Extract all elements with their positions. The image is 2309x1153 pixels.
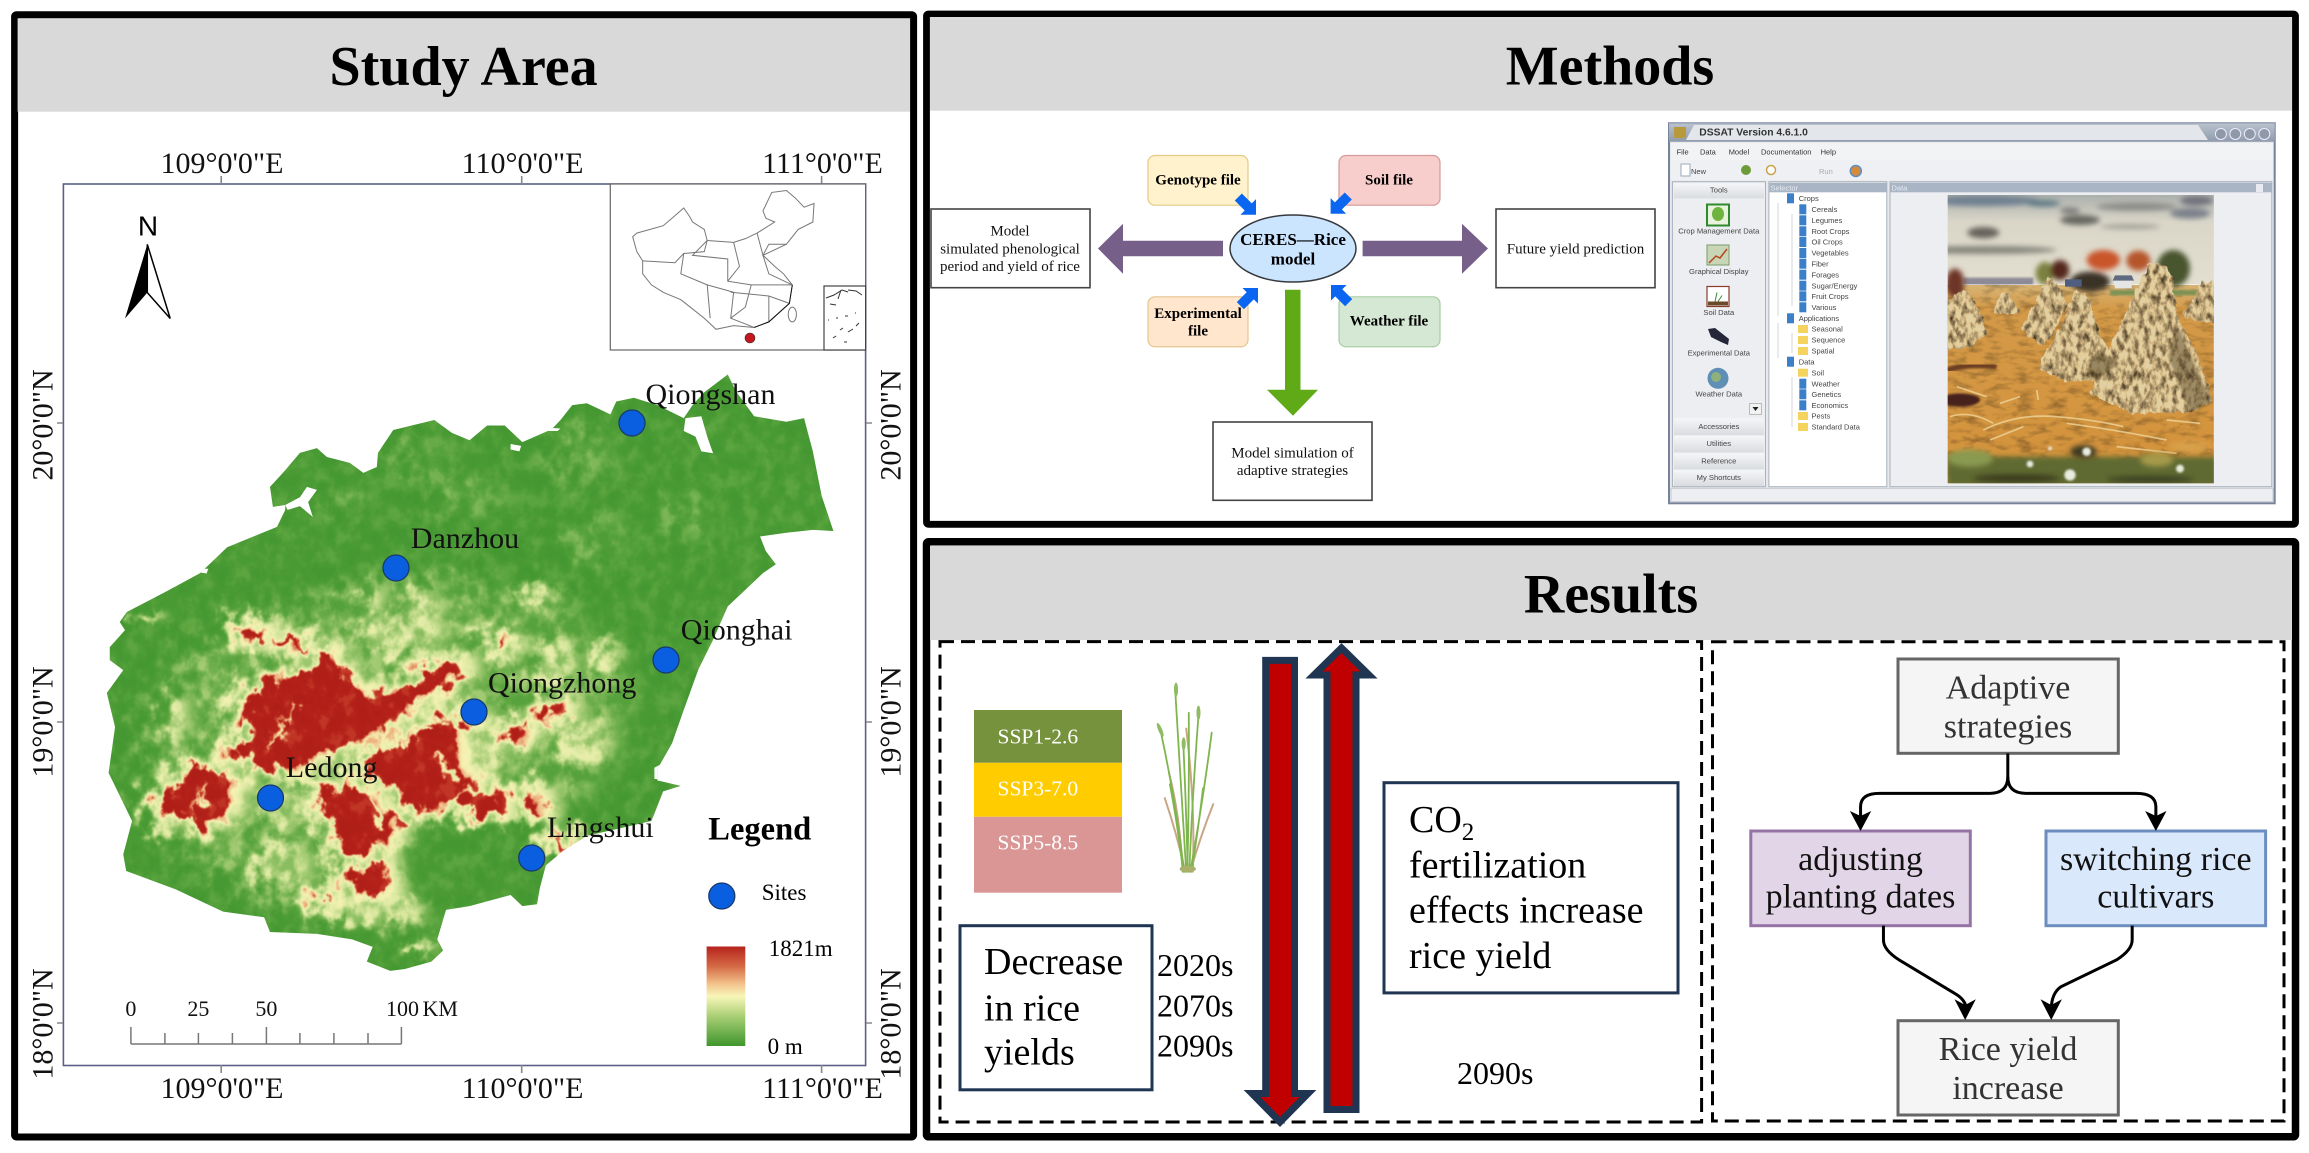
input: experimental file: Experimental xyxy=(1154,306,1242,322)
map legend: 1821m xyxy=(769,936,833,961)
longitude labels: 110°0'0"E xyxy=(462,1072,583,1105)
site labels: Qiongzhong xyxy=(488,666,636,700)
menu bar: Help xyxy=(1821,147,1836,156)
SSP scenario stack: SSP5-8.5 xyxy=(998,830,1078,854)
output box: phenological period and yield: Model xyxy=(990,224,1030,240)
site labels: Qiongshan xyxy=(646,378,776,411)
selector tree panel: Fiber xyxy=(1812,259,1829,268)
selector tree panel: Sequence xyxy=(1812,336,1845,345)
flow connectors xyxy=(1850,753,2167,1020)
decade labels for decrease: 2020s xyxy=(1157,947,1233,983)
SSP scenario stack: SSP1-2.6 xyxy=(998,724,1078,748)
window title bar: DSSAT Version 4.6.1.0 xyxy=(1699,127,1808,138)
input: weather file xyxy=(1339,297,1440,347)
selector tree panel: Economics xyxy=(1812,401,1848,410)
inset map of China xyxy=(610,184,866,350)
map legend: Legend xyxy=(708,812,811,848)
latitude labels: 18°0'0"N xyxy=(26,968,60,1080)
selector tree panel: Seasonal xyxy=(1812,325,1843,334)
map of Hainan island terrain xyxy=(106,374,834,971)
longitude labels xyxy=(161,147,883,1105)
menu bar: Model xyxy=(1729,147,1749,156)
tools side panel: Utilities xyxy=(1707,439,1731,448)
box: adaptive strategies: Adaptive xyxy=(1946,669,2070,706)
site labels: Qionghai xyxy=(681,614,792,646)
South China Sea inset box xyxy=(824,286,866,350)
callout: CO2 fertilization: fertilization xyxy=(1409,845,1586,887)
tools side panel: Weather Data xyxy=(1695,390,1743,399)
tools side panel: Experimental Data xyxy=(1688,349,1751,358)
selector tree panel: Vegetables xyxy=(1812,249,1849,258)
callout: decrease in rice yields: yields xyxy=(984,1031,1075,1073)
input: experimental file: file xyxy=(1188,323,1208,339)
map legend xyxy=(707,812,833,1059)
box: adaptive strategies: strategies xyxy=(1944,708,2072,745)
heading: Results: Results xyxy=(1524,564,1698,626)
callout: CO2 fertilization: CO xyxy=(1409,799,1462,841)
toolbar: New xyxy=(1691,167,1707,176)
dashed panel: adaptation xyxy=(1712,642,2284,1121)
harvest field painting xyxy=(1910,193,2217,487)
selector tree panel: Spatial xyxy=(1812,347,1835,356)
output box: adaptive strategies: Model simulation of xyxy=(1231,445,1354,461)
arrow: model to future prediction xyxy=(1363,224,1488,274)
menu bar: File xyxy=(1677,147,1689,156)
input: weather file: Weather file xyxy=(1350,314,1429,330)
panel: study area xyxy=(15,15,914,1137)
selector tree panel: Various xyxy=(1812,303,1837,312)
dashed panel: climate impact xyxy=(940,642,1702,1122)
toolbar xyxy=(1671,160,2273,180)
selector tree panel: Forages xyxy=(1812,270,1839,279)
decade labels for decrease: 2070s xyxy=(1157,987,1233,1023)
site markers xyxy=(258,410,679,871)
menu bar: Documentation xyxy=(1761,147,1811,156)
box: switching rice cultivars xyxy=(2046,831,2266,926)
elevation colour bar xyxy=(707,946,745,1046)
heading: Methods: Methods xyxy=(1506,36,1714,98)
selector tree panel: Applications xyxy=(1799,314,1839,323)
arrow: model to simulated output xyxy=(1098,224,1223,274)
tools side panel: Soil Data xyxy=(1703,308,1735,317)
box: rice yield increase: increase xyxy=(1952,1070,2064,1107)
tools side panel: Accessories xyxy=(1698,422,1739,431)
north arrow xyxy=(125,210,170,318)
box: adjusting planting dates xyxy=(1751,831,1970,926)
model ellipse: CERES—Rice xyxy=(1240,230,1346,249)
tools side panel: My Shortcuts xyxy=(1697,473,1741,482)
input: genotype file: Genotype file xyxy=(1155,173,1241,189)
decade label for increase: 2090s xyxy=(1457,1055,1533,1091)
scale bar: 50 xyxy=(255,996,277,1021)
selector tree panel: Genetics xyxy=(1812,390,1841,399)
output box: adaptive strategies xyxy=(1213,422,1372,500)
box: rice yield increase xyxy=(1898,1021,2118,1115)
output box: future yield prediction: Future yield prediction xyxy=(1507,242,1645,258)
longitude labels: 111°0'0"E xyxy=(762,147,883,180)
callout: CO2 fertilization: 2 xyxy=(1462,819,1474,846)
methods header bar xyxy=(930,17,2292,111)
selector tree panel xyxy=(1769,182,1887,487)
selector tree panel: Oil Crops xyxy=(1812,238,1843,247)
selector tree panel: Sugar/Energy xyxy=(1812,281,1858,290)
scale bar xyxy=(125,996,458,1044)
input: soil file: Soil file xyxy=(1365,173,1413,189)
data panel: Data xyxy=(1892,184,1908,192)
selector tree panel: Cereals xyxy=(1812,205,1838,214)
callout: CO2 fertilization xyxy=(1384,783,1678,993)
SSP scenario stack xyxy=(974,710,1122,893)
selector tree panel: Data xyxy=(1799,357,1815,366)
box: rice yield increase: Rice yield xyxy=(1939,1031,2077,1068)
tools side panel: Crop Management Data xyxy=(1678,226,1760,235)
tools side panel: Graphical Display xyxy=(1689,267,1749,276)
selector tree panel: Soil xyxy=(1812,368,1824,377)
water bodies xyxy=(200,416,713,781)
selector tree panel: Standard Data xyxy=(1812,423,1861,432)
callout: decrease in rice yields: Decrease xyxy=(984,941,1123,983)
elevation surface xyxy=(106,374,834,971)
decade labels for decrease: 2090s xyxy=(1157,1027,1233,1063)
latitude labels: 20°0'0"N xyxy=(26,369,60,481)
input: genotype file xyxy=(1148,156,1248,205)
tools side panel: Reference xyxy=(1701,456,1736,465)
site labels: Ledong xyxy=(286,751,377,784)
callout: decrease in rice yields xyxy=(960,926,1152,1090)
window title bar xyxy=(1669,123,2275,142)
callout: decrease in rice yields: in rice xyxy=(984,988,1080,1030)
longitude labels: 109°0'0"E xyxy=(161,147,283,180)
north arrow: N xyxy=(138,210,158,242)
arrow: yield down xyxy=(1252,660,1308,1122)
scale bar: 25 xyxy=(187,996,209,1021)
latitude labels: 19°0'0"N xyxy=(874,666,908,778)
longitude labels: 109°0'0"E xyxy=(161,1072,283,1105)
output box: phenological period and yield: simulated phenological xyxy=(940,242,1080,258)
tools side panel xyxy=(1672,182,1766,487)
latitude labels: 18°0'0"N xyxy=(874,968,908,1080)
panel: methods xyxy=(926,14,2296,524)
SSP scenario stack: SSP3-7.0 xyxy=(998,776,1078,800)
arrow: model to adaptive strategies xyxy=(1267,290,1318,416)
map frame xyxy=(57,176,872,1073)
selector tree panel: Pests xyxy=(1812,412,1831,421)
longitude labels: 110°0'0"E xyxy=(462,147,583,180)
site labels xyxy=(286,378,792,844)
selector tree panel: Selector xyxy=(1770,184,1799,192)
data panel xyxy=(1890,182,2272,487)
map legend: Sites xyxy=(762,880,806,905)
site labels: Danzhou xyxy=(411,522,519,555)
status bar xyxy=(1671,488,2273,502)
output box: phenological period and yield: period and yield of rice xyxy=(940,259,1080,275)
latitude labels: 20°0'0"N xyxy=(874,369,908,481)
menu bar xyxy=(1671,143,2273,160)
box: adaptive strategies xyxy=(1898,659,2118,753)
callout: CO2 fertilization: rice yield xyxy=(1409,935,1551,977)
input: experimental file xyxy=(1148,297,1248,347)
decade labels for decrease xyxy=(1157,947,1233,1063)
callout: CO2 fertilization: effects increase xyxy=(1409,890,1644,932)
model ellipse xyxy=(1230,215,1356,282)
latitude labels: 19°0'0"N xyxy=(26,666,60,778)
longitude labels: 111°0'0"E xyxy=(762,1072,883,1105)
selector tree panel: Root Crops xyxy=(1812,227,1850,236)
input: soil file xyxy=(1339,156,1440,205)
DSSAT software screenshot xyxy=(1669,123,2275,503)
selector tree panel: Fruit Crops xyxy=(1812,292,1849,301)
box: adjusting planting dates: planting dates xyxy=(1766,879,1955,916)
toolbar: Run xyxy=(1819,167,1833,176)
box: switching rice cultivars: switching rice xyxy=(2060,841,2252,878)
scale bar: 0 xyxy=(125,996,136,1021)
arrow: yield up xyxy=(1314,648,1369,1110)
selector tree panel: Weather xyxy=(1812,379,1840,388)
study area header bar xyxy=(18,18,910,112)
latitude labels xyxy=(26,369,908,1080)
selector tree panel: Crops xyxy=(1799,194,1819,203)
model ellipse: model xyxy=(1271,250,1315,269)
box: switching rice cultivars: cultivars xyxy=(2097,879,2214,916)
output box: future yield prediction xyxy=(1496,209,1655,288)
box: adjusting planting dates: adjusting xyxy=(1798,841,1923,878)
panel: results xyxy=(926,542,2296,1137)
scale bar: 100 KM xyxy=(386,996,458,1021)
map legend: 0 m xyxy=(768,1034,803,1059)
blue input arrows xyxy=(1231,188,1356,313)
results header bar xyxy=(930,546,2292,640)
menu bar: Data xyxy=(1700,147,1717,156)
selector tree panel: Legumes xyxy=(1812,216,1843,225)
icon: rice plant xyxy=(1155,683,1213,872)
heading: Study Area: Study Area xyxy=(330,36,598,98)
site labels: Lingshui xyxy=(547,811,654,844)
tools side panel: Tools xyxy=(1710,186,1728,195)
output box: phenological period and yield xyxy=(931,209,1090,288)
output box: adaptive strategies: adaptive strategies xyxy=(1237,463,1348,479)
Hainan highlight xyxy=(745,333,755,343)
